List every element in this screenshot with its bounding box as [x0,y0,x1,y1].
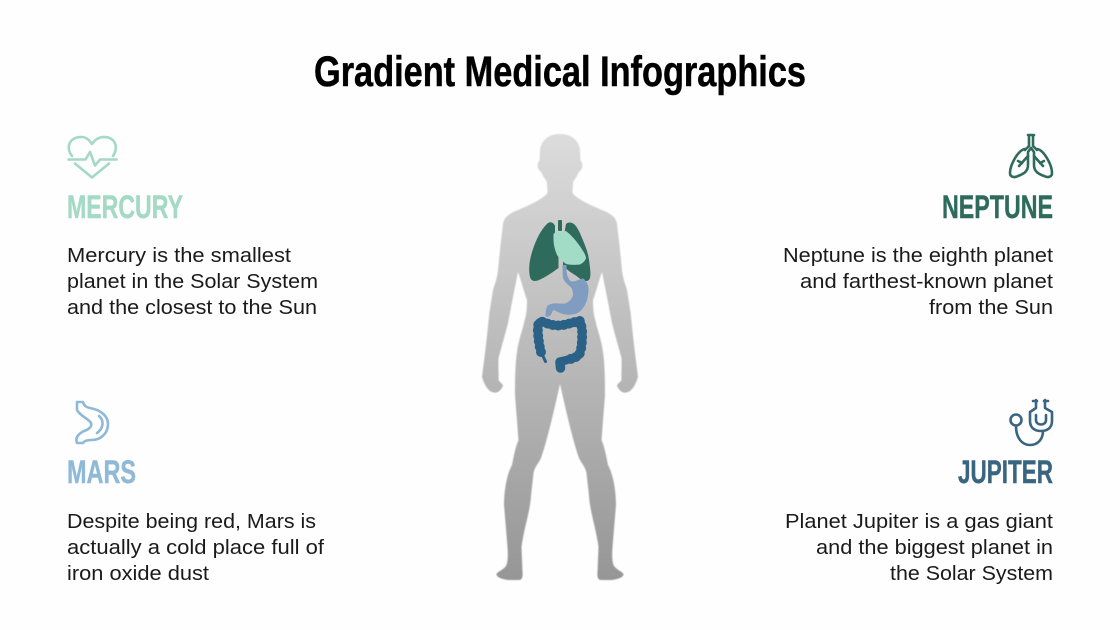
heading: mars: MARS [67,454,136,490]
text block: mars: actually a cold place full of [67,536,324,559]
human body figure [482,134,638,580]
heading: mercury: MERCURY [67,189,183,225]
text block: mercury: and the closest to the Sun [67,296,317,319]
organ: stomach [546,265,589,317]
organ: heart [554,231,586,265]
text block: neptune: Neptune is the eighth planet [783,244,1053,267]
text block: jupiter: Planet Jupiter is a gas giant [785,510,1053,533]
text block: mercury: Mercury is the smallest [67,244,291,267]
text block: mars [67,510,324,585]
text block: neptune: from the Sun [929,296,1053,319]
text block: neptune: and farthest-known planet [800,270,1053,293]
text block: jupiter: and the biggest planet in [816,536,1053,559]
icon: stomach [76,402,108,443]
heading: neptune: NEPTUNE [942,189,1053,225]
panel: mars [67,402,324,585]
text block: jupiter [785,510,1053,585]
text block: neptune [783,244,1053,319]
organ: lungs and trachea [529,220,590,281]
panel: jupiter [785,400,1053,585]
panel: mercury [67,137,318,319]
body silhouette [482,134,638,580]
icon: heart with pulse [68,137,116,178]
title: Gradient Medical Infographics [314,48,806,96]
text block: jupiter: the Solar System [890,562,1053,585]
text block: mercury [67,244,318,319]
icon: lungs [1010,135,1052,177]
heading: jupiter: JUPITER [958,454,1053,490]
text block: mars: Despite being red, Mars is [67,510,316,533]
panel: neptune [783,135,1053,319]
text block: mars: iron oxide dust [67,562,209,585]
icon: stethoscope [1010,400,1052,445]
organ: large intestine [538,321,582,368]
text block: mercury: planet in the Solar System [67,270,318,293]
